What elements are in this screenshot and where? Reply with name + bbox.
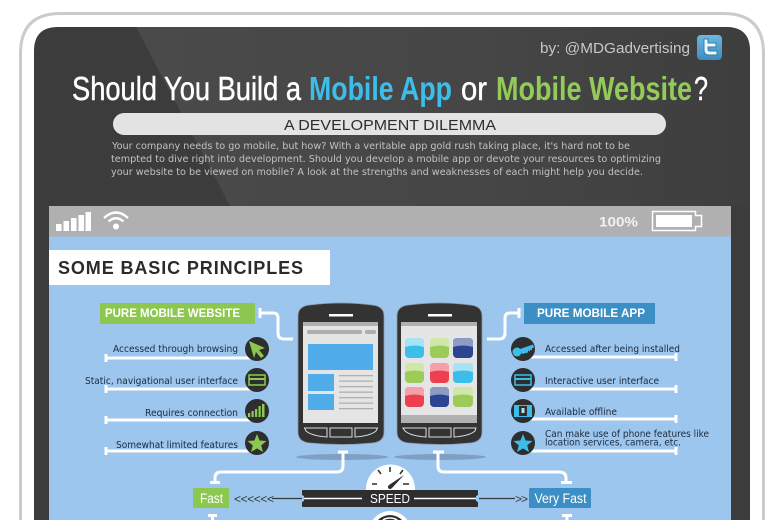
app feature list: location services, camera, etc. (545, 438, 681, 448)
website feature list: Static, navigational user interface (85, 376, 238, 387)
arrow: toward very fast (479, 492, 528, 506)
intro paragraph: your website to be viewed on mobile? A look at the strengths and weaknesses of each might help you decide. (111, 167, 643, 178)
website feature list: Requires connection (145, 408, 238, 419)
icon: key (511, 337, 535, 361)
icon: next metric dial (373, 511, 407, 520)
connector: website label to phone (260, 308, 293, 339)
tag: fast: Fast (200, 491, 223, 506)
app feature list: Can make use of phone features like (545, 429, 709, 440)
website feature list: Somewhat limited features (116, 440, 238, 451)
icon: connection bars (245, 399, 269, 423)
tag: fast (193, 488, 229, 508)
icon: green star (245, 431, 269, 455)
subtitle pill: A DEVELOPMENT DILEMMA (284, 117, 496, 134)
phone screen background (49, 236, 731, 520)
byline: by: @MDGadvertising (540, 41, 690, 57)
app feature list (530, 344, 709, 455)
phone: mobile app (397, 303, 482, 444)
status bar (49, 206, 731, 237)
label: pure mobile website: PURE MOBILE WEBSITE (105, 306, 240, 320)
section heading (49, 250, 330, 285)
tag: very fast (529, 488, 591, 508)
intro paragraph: Your company needs to go mobile, but how? With a veritable app gold rush taking place, it's hard not to be (111, 141, 630, 152)
icon: offline film (511, 399, 535, 423)
connector: website phone to speed (210, 452, 348, 482)
tag: very fast: Very Fast (534, 491, 587, 506)
subtitle pill (113, 113, 666, 135)
intro paragraph (111, 141, 661, 178)
app icon grid (405, 338, 473, 407)
icon: signal bars (56, 212, 91, 231)
website feature list (85, 344, 250, 455)
intro paragraph: tempted to dive right into development. Should you develop a mobile app or devote your resources to optimizing (111, 154, 661, 165)
icon: battery (652, 212, 702, 230)
phone shadows (296, 454, 486, 460)
battery percent: 100% (599, 214, 639, 230)
title: Should You Build a (72, 70, 302, 107)
title: ? (694, 70, 708, 107)
arrow: toward very fast: >> (515, 492, 528, 506)
title: Mobile App (309, 70, 452, 107)
icon: interface card (245, 368, 269, 392)
app feature list: Available offline (545, 407, 617, 418)
phone: mobile website (298, 303, 384, 444)
connector: app phone to speed (433, 452, 572, 482)
icon: wifi (104, 212, 128, 230)
icon: twitter (697, 35, 722, 60)
icon: interactive card (511, 368, 535, 392)
speed bar (302, 490, 478, 507)
section heading: SOME BASIC PRINCIPLES (58, 258, 303, 278)
icon: cursor (245, 337, 269, 361)
title (72, 70, 708, 107)
connector stubs below tags (208, 516, 572, 520)
arrow: toward fast (234, 492, 302, 506)
speed bar: SPEED (370, 492, 410, 506)
label: pure mobile app: PURE MOBILE APP (537, 306, 645, 320)
arrow: toward fast: <<<<<< (234, 492, 274, 506)
title: or (461, 70, 487, 107)
icon: speedometer (366, 464, 415, 490)
app feature list: Accessed after being installed (545, 344, 680, 355)
label: pure mobile app (524, 303, 655, 324)
title: Mobile Website (496, 70, 692, 107)
app feature list: Interactive user interface (545, 376, 659, 387)
icon: blue star (511, 431, 535, 455)
label: pure mobile website (100, 303, 255, 324)
website feature list: Accessed through browsing (113, 344, 238, 355)
connector: app label to phone (487, 308, 519, 339)
